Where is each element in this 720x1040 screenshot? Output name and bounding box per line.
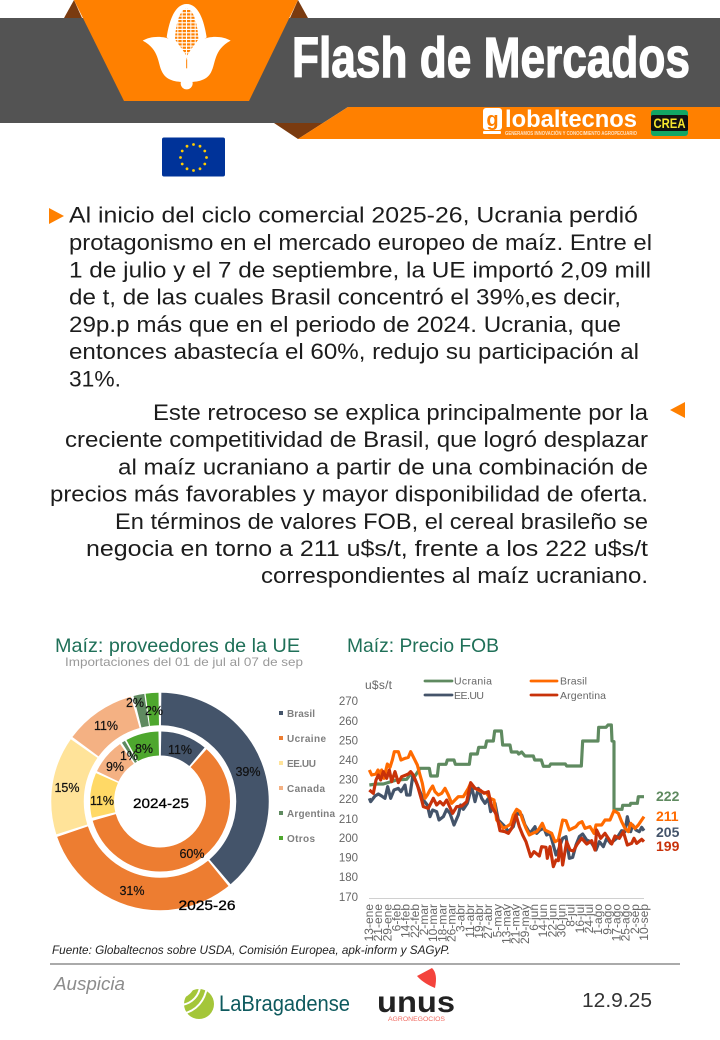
logo: CREA [651,110,688,136]
percentage labels: 11% [90,794,114,808]
y axis labels: 240 [339,755,358,767]
percentage labels: 11% [168,743,192,757]
logo: globaltecnos: lobaltecnos [505,106,637,133]
x axis labels: 22-jun [545,904,559,937]
chart legend: Ucrania [454,676,492,688]
x axis labels: 5-may [490,904,504,937]
y axis labels: 220 [339,794,358,806]
x axis labels: 18-mar [435,904,449,942]
date: 12.9.25 [582,990,652,1012]
x axis labels: 16-jul [573,904,587,933]
text block: paragraph 1: entonces abastecía el 60%, redujo su participación al [69,339,639,364]
heading: precio FOB: Maíz: Precio FOB [347,635,499,657]
y axis labels: 260 [339,716,358,728]
heading: proveedores: Maíz: proveedores de la UE [55,635,300,657]
text block: paragraph 2: precios más favorables y mayor disponibilidad de oferta. [50,482,648,507]
x axis labels: 24-jul [582,904,596,933]
chart legend [425,676,606,702]
source note: Fuente: Globaltecnos sobre USDA, Comisión Europea, apk-inform y SAGyP. [52,945,450,957]
x axis labels: 6-jun [527,904,541,931]
icon: EU flag [162,138,225,176]
percentage labels: 15% [54,781,80,795]
arrow: paragraph 1 bullet [49,208,64,224]
chart legend: Brasil [560,676,587,688]
text block: paragraph 1: 1 de julio y el 7 de septiembre, la UE importó 2,09 mill [69,257,651,282]
percentage labels: 11% [94,719,118,733]
x axis labels: 29-may [518,904,532,944]
line: Argentina [369,770,644,867]
x axis labels: 10-sep [637,904,651,941]
label: 2025-26: 2025-26 [178,897,236,913]
percentage labels [54,696,261,898]
line chart: FOB prices [339,676,680,944]
line: Brasil [369,752,644,842]
logo: Unus: AGRONEGOCIOS [388,1017,445,1023]
x axis labels: 11-abr [463,904,477,938]
y axis labels: 170 [339,892,358,904]
percentage labels: 2% [145,704,163,718]
text block: paragraph 1: de t, de las cuales Brasil concentró el 39%,es decir, [69,285,621,310]
logo: La Bragadense: LaBragadense [219,991,350,1016]
x axis labels: 13-may [500,904,514,944]
outer ring 2025-26 [68,709,252,894]
text block: paragraph 2 [50,400,649,588]
donut chart: suppliers [54,696,261,913]
orange lower ribbon [298,107,720,139]
donut legend [279,709,335,845]
unit label: u$s/t [365,678,393,692]
y axis labels: 230 [339,774,358,786]
label: 2024-25: 2024-25 [133,795,189,811]
x axis labels: 1-ago [591,904,605,935]
x axis labels: 19-abr [472,904,486,939]
logo: globaltecnos: g [486,109,499,131]
y axis labels: 250 [339,736,358,748]
percentage labels: 9% [106,760,124,774]
y axis labels: 190 [339,852,358,864]
line: EE.UU [369,777,644,858]
y axis labels: 210 [339,814,358,826]
x axis labels: 9-ago [600,904,614,935]
sponsor label: Auspicia [53,974,125,994]
end value labels: 222 [656,788,680,804]
text block: paragraph 1: Al inicio del ciclo comercial 2025-26, Ucrania perdió [69,202,638,228]
x axis labels: 10-mar [426,904,440,942]
text block: paragraph 2: negocia en torno a 211 u$s/t, frente a los 222 u$s/t [86,536,649,561]
icon: corn [143,4,231,89]
text block: paragraph 1 [69,202,652,392]
percentage labels: 31% [119,884,145,898]
text block: paragraph 1: 29p.p más que en el periodo de 2024. Ucrania, que [69,312,621,337]
y axis labels: 180 [339,872,358,884]
donut legend: Argentina [287,809,335,820]
donut legend: Brasil [287,709,315,720]
x axis labels: 2-mar [417,904,431,935]
end value labels: 211 [656,808,679,824]
text block: paragraph 2: Este retroceso se explica principalmente por la [153,400,649,425]
x axis labels: 6-feb [390,904,404,931]
logo: Unus [377,968,455,1023]
x axis labels: 26-mar [444,904,458,942]
x axis labels: 21-ene [371,904,385,941]
subheading: importaciones: Importaciones del 01 de jul al 07 de sep [65,655,303,669]
text block: paragraph 1: protagonismo en el mercado europeo de maíz. Entre el [69,230,652,255]
x axis labels: 14-feb [399,904,413,938]
text block: paragraph 1: 31%. [69,366,121,392]
x axis labels: 21-may [509,904,523,944]
x axis labels: 25-ago [619,904,633,941]
x axis labels: 2-sep [628,904,642,934]
end value labels: 199 [656,838,680,854]
inner ring 2024-25 [102,744,218,860]
arrow: paragraph 2 bullet [670,402,685,418]
x axis labels: 27-abr [481,904,495,939]
x axis labels: 22-feb [408,904,422,938]
percentage labels: 1% [120,749,138,763]
text block: paragraph 2: correspondientes al maíz ucraniano. [261,563,648,588]
text block: paragraph 2: creciente competitividad de Brasil, que logró desplazar [65,427,649,452]
x axis labels: 8-jul [564,904,578,927]
donut legend: Otros [287,834,315,845]
header banner [0,0,720,139]
percentage labels: 8% [135,742,153,756]
x axis labels: 14-jun [536,904,550,937]
brown fold triangles [64,0,323,139]
x axis labels: 13-ene [362,904,376,941]
text block: paragraph 2: al maíz ucraniano a partir de una combinación de [118,454,648,479]
percentage labels: 39% [235,765,261,779]
donut legend: Ucraine [287,734,326,745]
data lines [369,725,644,867]
x axis labels: 3-abr [454,904,468,932]
x axis labels: 17-ago [610,904,624,941]
logo: Unus: unus [377,986,455,1019]
grey band [0,18,720,123]
y axis labels: 200 [339,833,358,845]
y axis labels: 270 [339,696,358,708]
chart legend: EE.UU [454,690,484,702]
logo: CREA: CREA [654,115,686,131]
x axis labels: 30-jun [554,904,568,937]
y axis labels [339,696,358,904]
x axis labels: 29-ene [380,904,394,941]
donut legend: EE.UU [287,759,316,770]
text block: paragraph 2: En términos de valores FOB, el cereal brasileño se [115,509,648,534]
end value labels [656,788,680,854]
chart legend: Argentina [560,690,606,702]
logo: La Bragadense [182,987,350,1019]
logo: globaltecnos: GENERAMOS INNOVACIÓN Y CONOCIMIENTO AGROPECUARIO [505,129,637,137]
donut legend: Canada [287,784,325,795]
percentage labels: 60% [179,847,205,861]
x axis labels [362,904,651,944]
end value labels: 205 [656,824,680,840]
orange trapezoid [74,0,298,101]
percentage labels: 2% [126,696,144,710]
line: Ucrania [369,725,644,809]
